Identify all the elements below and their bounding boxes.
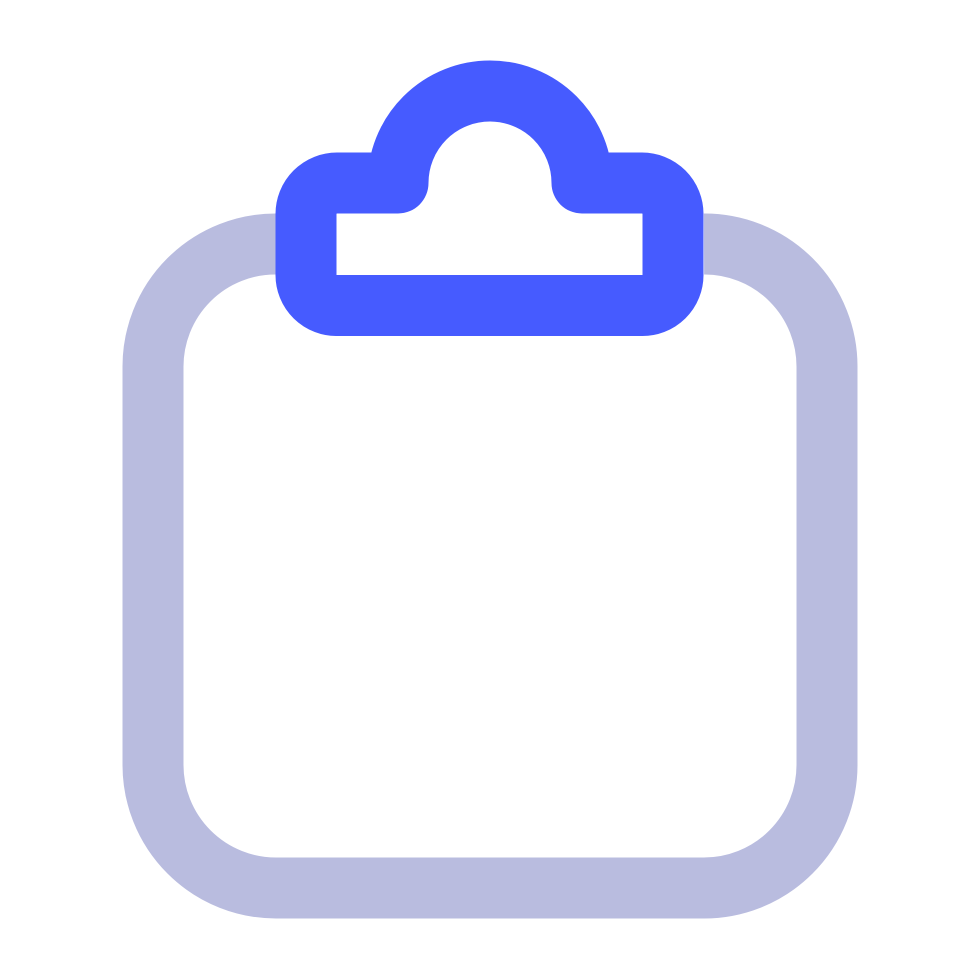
clipboard clip xyxy=(306,91,673,306)
clipboard board outline xyxy=(153,244,827,888)
